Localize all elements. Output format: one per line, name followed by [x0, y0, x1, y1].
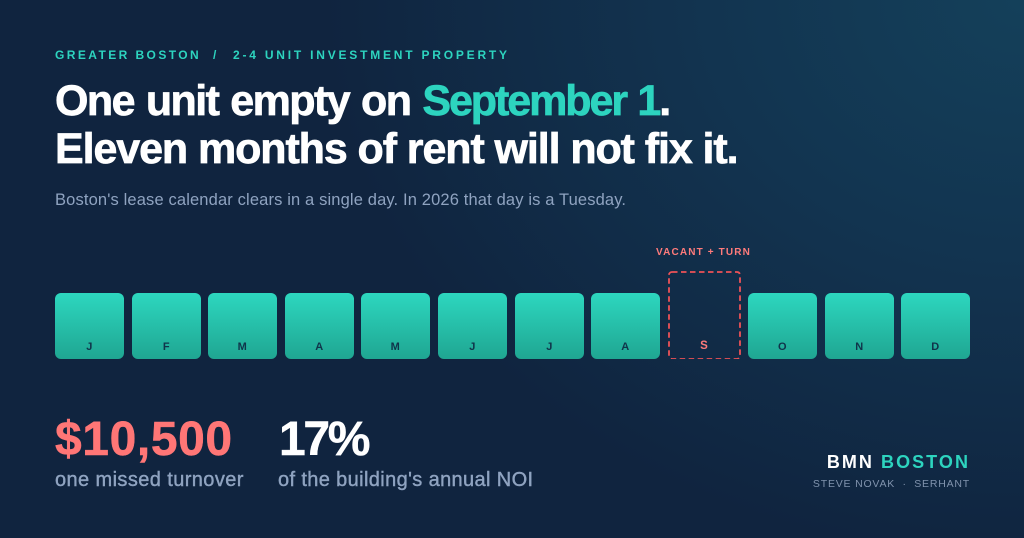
month: May: M — [391, 341, 400, 353]
month: February: F — [163, 341, 170, 353]
eyebrow label: GREATER BOSTON — [55, 48, 201, 62]
month: May — [361, 293, 430, 359]
month: October — [748, 293, 817, 359]
month: June — [438, 293, 507, 359]
month: April — [285, 293, 354, 359]
month: August: A — [621, 341, 630, 353]
month: February — [132, 293, 201, 359]
month: March — [208, 293, 277, 359]
month: January — [55, 293, 124, 359]
month: October: O — [778, 341, 787, 353]
month: July: J — [546, 341, 553, 353]
brand byline: STEVE NOVAK · SERHANT — [813, 478, 970, 490]
month: June: J — [469, 341, 476, 353]
month: January: J — [86, 341, 93, 353]
title: Eleven months of rent will not fix it. — [55, 125, 737, 173]
month: December — [901, 293, 970, 359]
month: December: D — [931, 341, 940, 353]
month: November: N — [855, 341, 864, 353]
title: One unit empty on September 1. — [55, 77, 670, 125]
month: November — [825, 293, 894, 359]
vacant label: VACANT + TURN — [656, 247, 751, 258]
eyebrow label — [55, 48, 510, 62]
month: September vacant dashed box: S — [700, 340, 708, 352]
brand name: BMN BOSTON — [827, 452, 970, 472]
month: July — [515, 293, 584, 359]
stat: percent caption: of the building's annual NOI — [278, 469, 533, 491]
stat: percent amount: 17% — [279, 413, 368, 466]
eyebrow label: / — [213, 48, 216, 62]
month: March: M — [238, 341, 247, 353]
month: April: A — [315, 341, 324, 353]
eyebrow label: 2-4 UNIT INVESTMENT PROPERTY — [233, 48, 510, 62]
month calendar strip — [55, 271, 970, 359]
title — [55, 77, 737, 173]
subtitle: Boston's lease calendar clears in a single day. In 2026 that day is a Tuesday. — [55, 191, 626, 209]
month: August — [591, 293, 660, 359]
stat: dollar amount: $10,500 — [55, 413, 233, 466]
stat: dollar caption: one missed turnover — [55, 469, 244, 491]
month: September vacant dashed box — [668, 271, 741, 359]
